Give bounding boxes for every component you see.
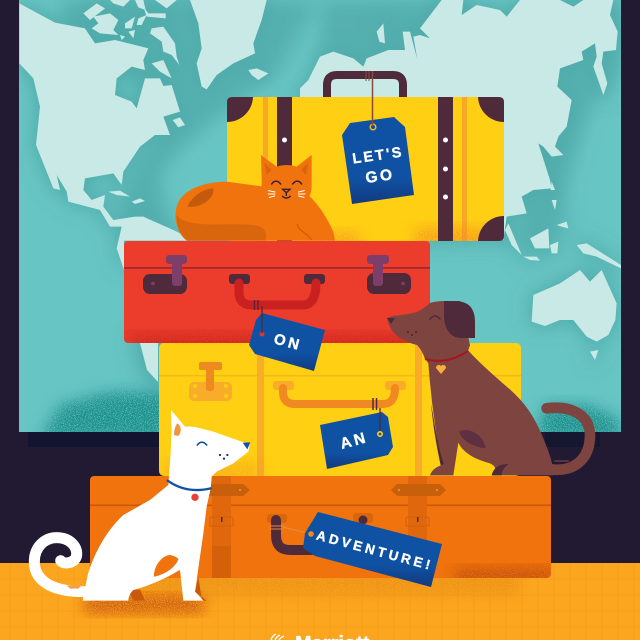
- suitcase: red: [124, 241, 430, 343]
- body: [83, 410, 250, 601]
- tag: ON: [249, 306, 325, 371]
- handle: [327, 75, 403, 98]
- tail mark: [555, 460, 568, 462]
- tag: LET'S GO: LET'S: [352, 144, 405, 167]
- collar: [168, 481, 211, 490]
- head: [387, 301, 470, 359]
- tag: ON: ON: [272, 331, 304, 354]
- tag: ADVENTURE!: [283, 512, 442, 587]
- tag: LET'S GO: [342, 71, 414, 204]
- tag: ADVENTURE!: ADVENTURE!: [315, 528, 435, 573]
- tag: LET'S GO: GO: [364, 166, 396, 187]
- white dog: [34, 410, 250, 601]
- collar: [425, 351, 468, 361]
- leg shade: [431, 403, 444, 465]
- shadow under white dog: [84, 596, 204, 613]
- body: [425, 351, 553, 475]
- face: [174, 423, 181, 436]
- handle: [229, 274, 250, 284]
- wall shadow under map: [28, 432, 600, 447]
- lock left: [143, 274, 187, 294]
- tag: AN: AN: [338, 429, 370, 453]
- suitcase: orange bottom: [90, 476, 555, 584]
- brown dog: [387, 301, 590, 475]
- rear foot: [492, 464, 508, 475]
- ear: [444, 301, 475, 338]
- lock right: [367, 273, 411, 294]
- buckles: [406, 517, 429, 526]
- tag: AN: [320, 408, 393, 469]
- straps: [277, 97, 292, 241]
- hind leg shadow: [128, 589, 145, 601]
- suitcase: large yellow: [159, 343, 521, 482]
- corners: [227, 97, 253, 122]
- hip spot: [459, 430, 486, 448]
- suitcase: yellow top: [227, 75, 515, 252]
- floor with grid: [0, 563, 640, 640]
- cat: [175, 155, 335, 241]
- cat head: [261, 155, 312, 209]
- latch: [189, 382, 232, 401]
- strap plates: [205, 484, 250, 496]
- handle: [273, 381, 294, 390]
- spot: [154, 555, 178, 577]
- tail: [34, 538, 83, 592]
- world map: [19, 0, 621, 440]
- heart tag: [436, 365, 446, 374]
- cat body: [175, 182, 335, 241]
- handle: [267, 514, 287, 523]
- straps: [212, 476, 231, 578]
- tail: [547, 408, 590, 470]
